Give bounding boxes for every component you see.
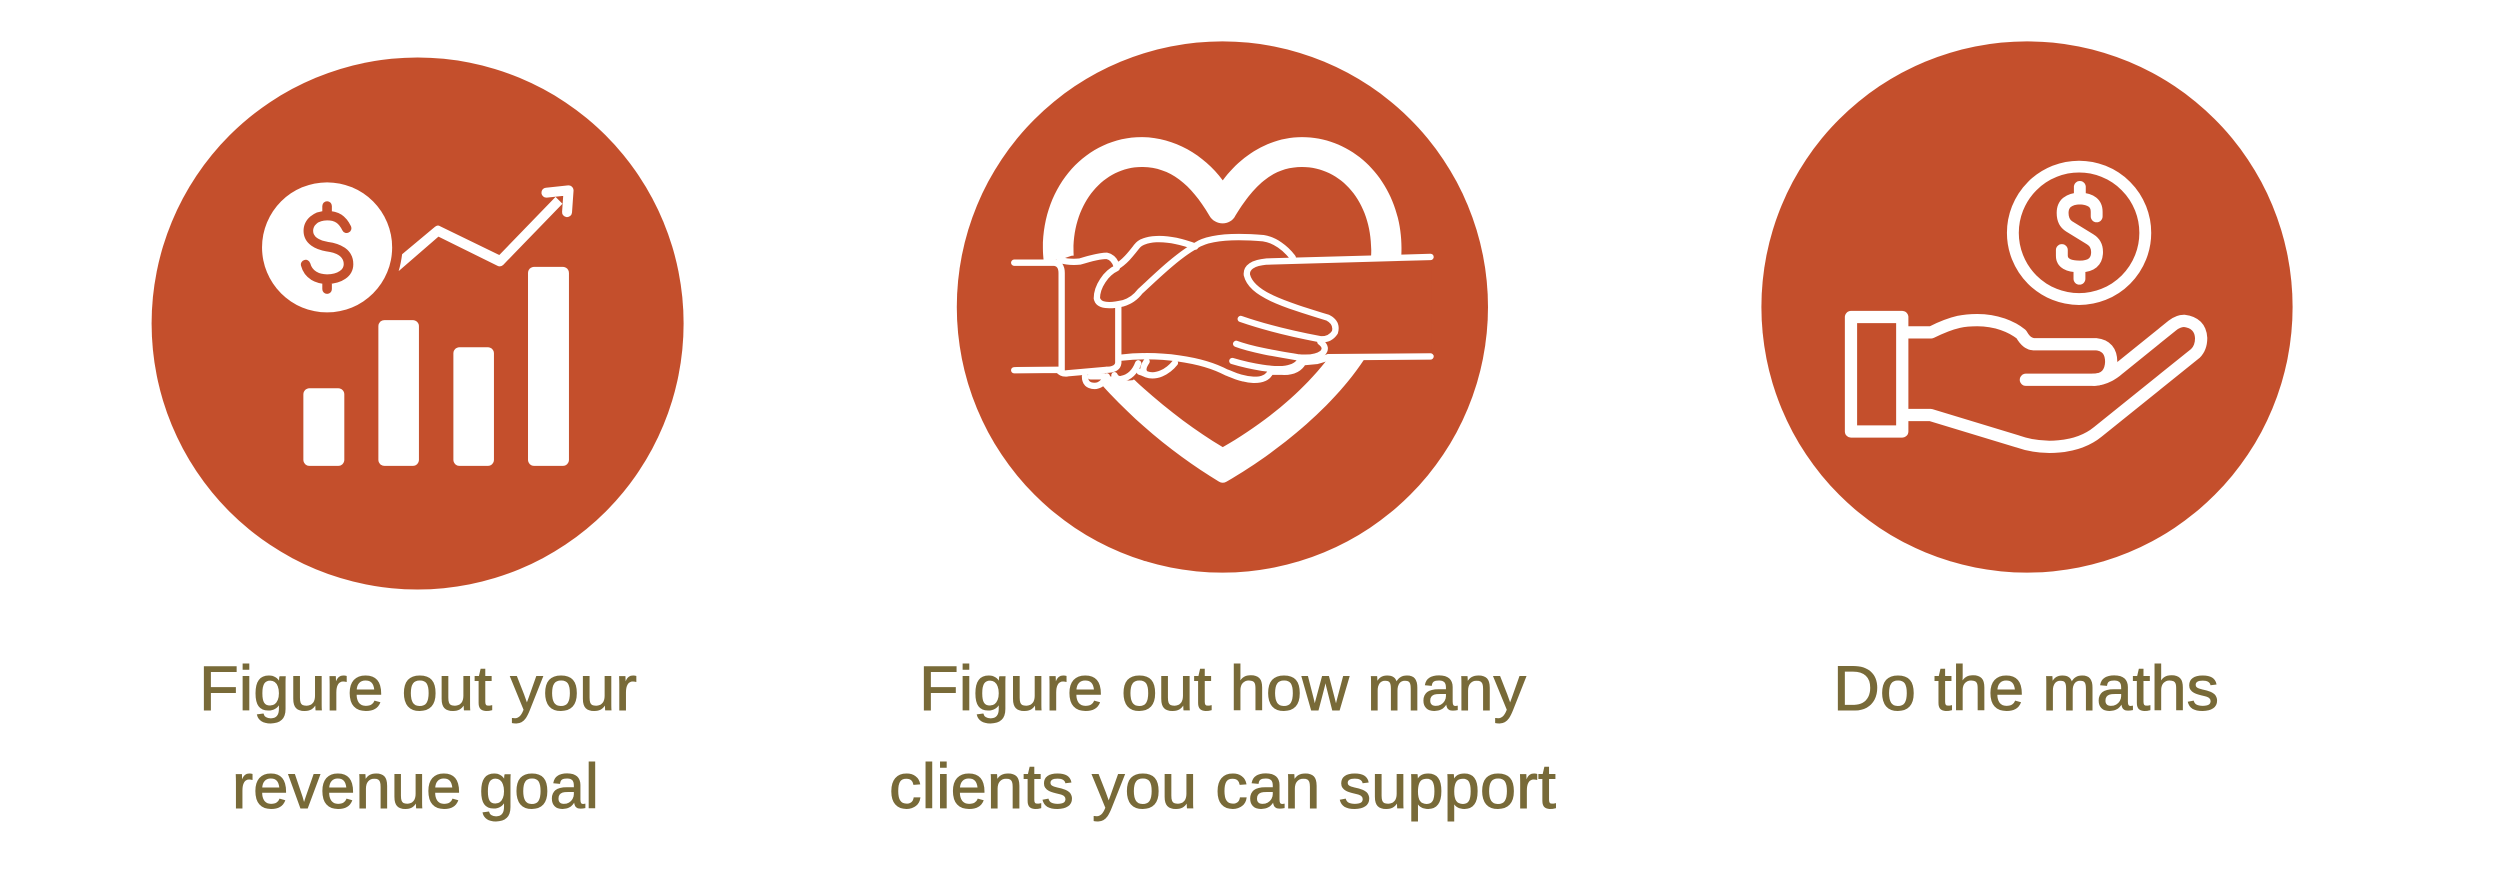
icon: hands silhouette [1012,235,1431,388]
icon: handshake over heart [1012,137,1431,483]
caption: client capacity: Figure out how many [919,654,1527,724]
icon: dollar coin outline [2013,167,2145,299]
caption: client capacity: clients you can support [889,752,1557,822]
icon: rising trend arrow [399,190,569,271]
icon: heart outline [1043,137,1401,483]
caption: revenue goal: Figure out your [199,654,637,724]
icon: hands line work [1014,237,1431,386]
circle badge: revenue goal [152,58,684,590]
caption: revenue goal [199,654,637,822]
caption: do the maths: Do the maths [1833,654,2219,724]
caption: revenue goal: revenue goal [232,752,599,822]
icon: open hand [1851,317,2201,447]
panel: client capacity [889,41,1557,822]
panel: do the maths [1761,41,2293,724]
icon: coin above open hand [1851,167,2201,447]
circle badge: client capacity [957,41,1488,573]
circle badge: do the maths [1761,41,2293,573]
icon: dollar coin [262,182,392,312]
panel: revenue goal [152,58,684,822]
caption: client capacity [889,654,1557,822]
bar chart [303,267,569,466]
icon: coin and growth chart [262,182,569,466]
